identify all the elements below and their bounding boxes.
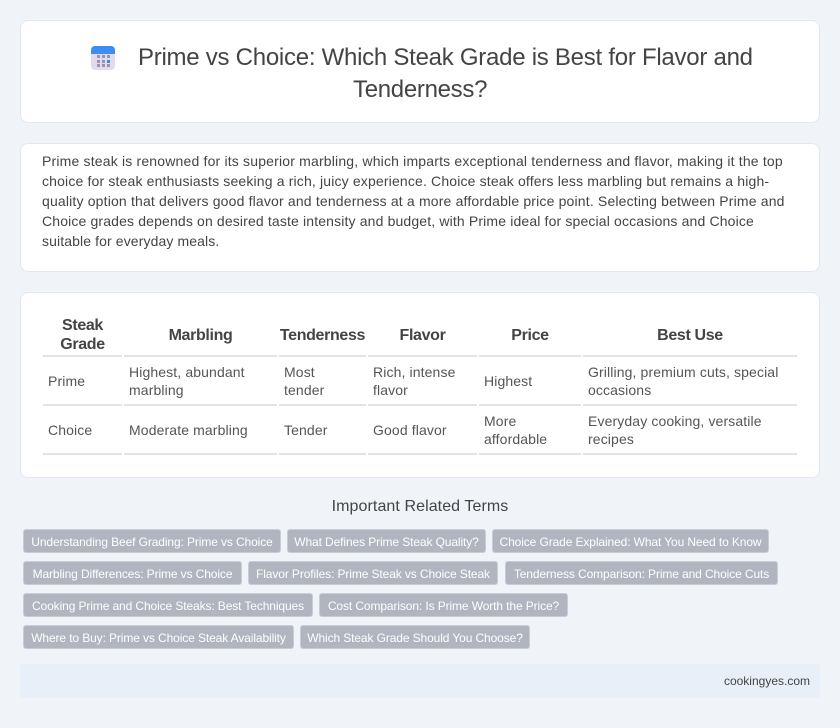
- tag: Flavor Profiles: Prime Steak vs Choice Steak: [256, 567, 490, 581]
- header: Steak Grade: Steak: [62, 317, 103, 334]
- comparison table: [43, 317, 797, 455]
- tag: Which Steak Grade Should You Choose?: [307, 631, 523, 645]
- tag: [23, 529, 281, 553]
- footer: [20, 664, 820, 698]
- header: Steak Grade: Grade: [60, 336, 105, 353]
- tags: related terms: [23, 529, 778, 649]
- text block: intro paragraph: choice for steak enthusiasts seeking a rich, juicy experience. Choice steak offers less marbling but remains a high-: [42, 173, 769, 189]
- text block: intro paragraph: Choice grades depends on desired taste intensity and budget, with Prime ideal for special occasions and Choice: [42, 213, 754, 229]
- tag: [505, 561, 778, 585]
- comparison table: occasions: [588, 382, 651, 398]
- title: Prime vs Choice: Which Steak Grade is Best for Flavor and: [138, 44, 753, 71]
- tag: [23, 593, 313, 617]
- comparison table: Moderate marbling: [129, 422, 248, 438]
- text block: intro paragraph: Prime steak is renowned for its superior marbling, which imparts exceptional tenderness and flavor, making it the top: [42, 153, 783, 169]
- comparison table: Tender: [284, 422, 328, 438]
- tag: [319, 593, 568, 617]
- panel: title header: [20, 20, 820, 123]
- tag: [23, 561, 242, 585]
- tag: Understanding Beef Grading: Prime vs Choice: [31, 535, 273, 549]
- text block: intro paragraph: suitable for everyday meals.: [42, 233, 219, 249]
- comparison table: Rich, intense: [373, 364, 456, 380]
- heading: related terms: Important Related Terms: [332, 498, 508, 515]
- header: Marbling: Marbling: [169, 327, 232, 344]
- comparison table: affordable: [484, 431, 547, 447]
- comparison table: Everyday cooking, versatile: [588, 413, 762, 429]
- comparison table: tender: [284, 382, 324, 398]
- panel: intro text: [20, 143, 820, 272]
- comparison table: marbling: [129, 382, 184, 398]
- text block: intro paragraph: [42, 153, 785, 249]
- tag: Marbling Differences: Prime vs Choice: [33, 567, 232, 581]
- footer brand: cookingyes.com: [724, 674, 810, 688]
- comparison table: Good flavor: [373, 422, 447, 438]
- header: Price: Price: [511, 327, 549, 344]
- tag: [23, 625, 294, 649]
- tag: [287, 529, 486, 553]
- icon: calendar: [91, 46, 115, 70]
- tag: Where to Buy: Prime vs Choice Steak Availability: [31, 631, 286, 645]
- tag: Cooking Prime and Choice Steaks: Best Techniques: [32, 599, 304, 613]
- comparison table: Highest, abundant: [129, 364, 245, 380]
- comparison table: More: [484, 413, 516, 429]
- comparison table: Grilling, premium cuts, special: [588, 364, 778, 380]
- comparison table: Most: [284, 364, 315, 380]
- row: Choice: Choice: [48, 422, 92, 438]
- tag: [300, 625, 530, 649]
- header: Best Use: Best Use: [657, 327, 723, 344]
- text block: intro paragraph: quality option that delivers good flavor and tenderness at a more affordable price point. Selecting between Prime and: [42, 193, 785, 209]
- header: Flavor: Flavor: [400, 327, 445, 344]
- comparison table: recipes: [588, 431, 634, 447]
- title: [138, 44, 753, 103]
- tag: [492, 529, 769, 553]
- header: Tenderness: Tenderness: [280, 327, 365, 344]
- tag: Choice Grade Explained: What You Need to Know: [500, 535, 761, 549]
- row: Prime: Prime: [48, 373, 85, 389]
- header: Steak Grade: [60, 317, 105, 353]
- tag: Cost Comparison: Is Prime Worth the Price?: [328, 599, 559, 613]
- panel: comparison table: [20, 292, 820, 478]
- tag: [248, 561, 498, 585]
- title: Tenderness?: [353, 76, 487, 103]
- comparison table: flavor: [373, 382, 408, 398]
- comparison table: Highest: [484, 373, 532, 389]
- tag: What Defines Prime Steak Quality?: [294, 535, 479, 549]
- tag: Tenderness Comparison: Prime and Choice Cuts: [514, 567, 769, 581]
